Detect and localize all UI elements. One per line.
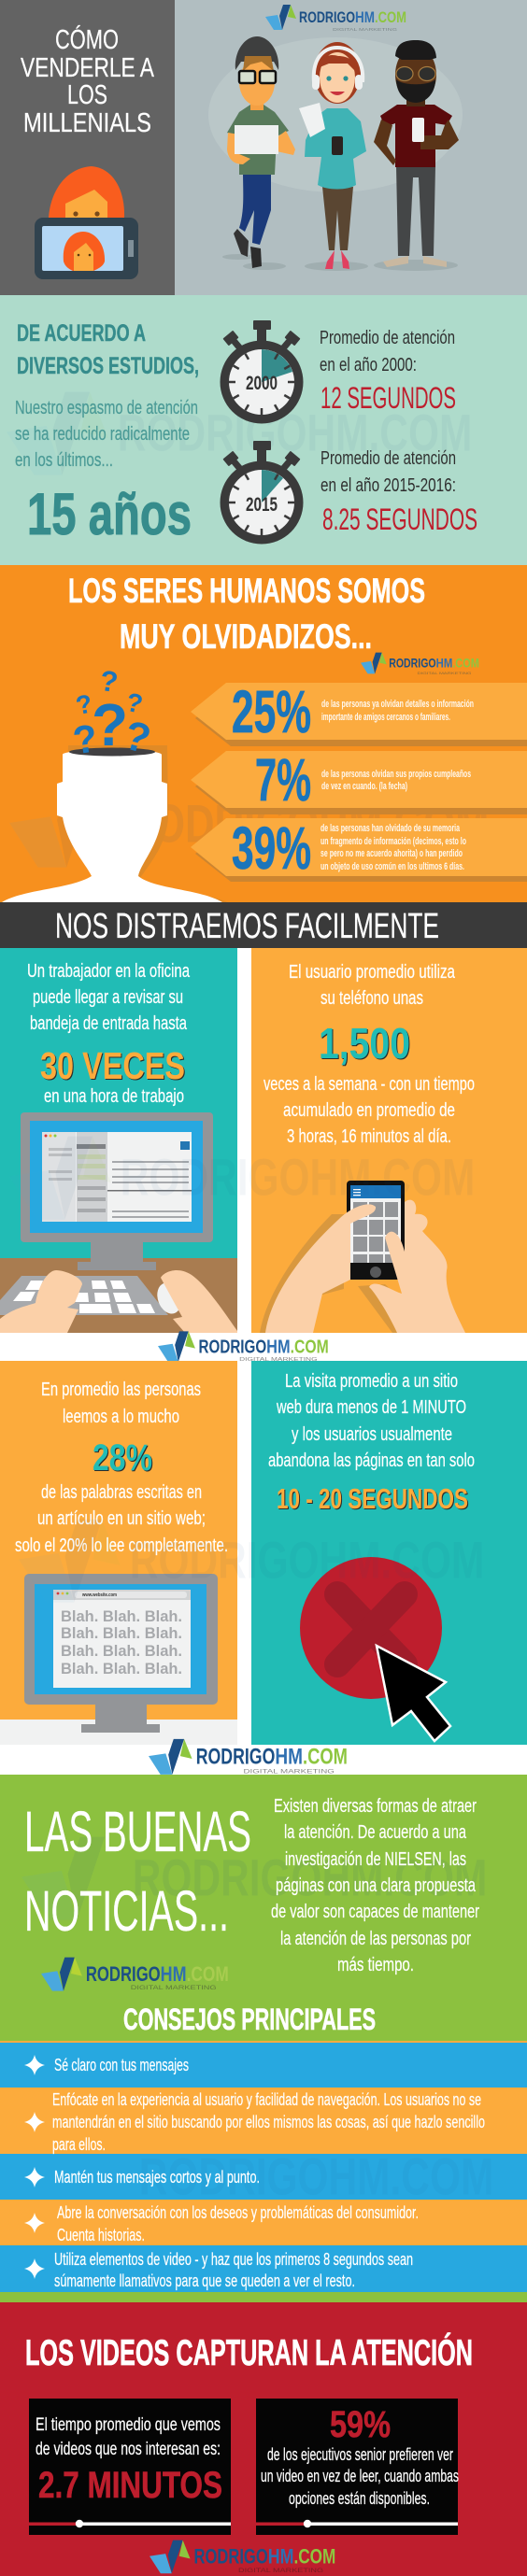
arrow row 39%: [191, 814, 527, 882]
illustration: monitor blah: Blah. Blah. Blah.: [61, 1660, 182, 1677]
title: LOS: [67, 80, 107, 110]
arrow row 39%: 39%: [232, 814, 311, 882]
icon: close button with cursor: [300, 1557, 450, 1741]
text: inbox: Un trabajador en la oficina: [27, 961, 191, 982]
text: attention span: [15, 398, 198, 471]
text: reading: leemos a lo mucho: [63, 1407, 179, 1427]
arrow row 25%: [191, 678, 527, 746]
logo: RODRIGO: [194, 2545, 268, 2569]
icon: stopwatch 2015: [221, 441, 303, 544]
logo: .COM: [375, 8, 406, 26]
text: Nielsen: [271, 1796, 479, 1975]
title: MILLENIALS: [23, 108, 151, 138]
illustration: monitor blah: Blah. Blah. Blah.: [61, 1624, 182, 1642]
illustration: monitor blah: Blah. Blah. Blah.: [61, 1642, 182, 1660]
panel: abandonment: [251, 1361, 527, 1745]
heading: NOTICIAS...: [24, 1879, 229, 1943]
text: year 2015: Promedio de atención: [320, 448, 456, 469]
illustration: monitor blah: [24, 1574, 218, 1733]
panel: inbox: [0, 948, 237, 1333]
text: phone intro: El usuario promedio utiliza: [289, 962, 456, 983]
video card 1: El tiempo promedio que vemos: [36, 2414, 221, 2435]
icon: stopwatch 2015: 2015: [246, 494, 278, 516]
text: visit: y los usuarios usualmente: [292, 1424, 452, 1445]
text: year 2000: Promedio de atención: [320, 328, 455, 348]
logo: section divider: .COM: [291, 1336, 329, 1357]
text: inbox: puede llegar a revisar su: [33, 987, 183, 1008]
logo: DIGITAL MARKETING: [333, 27, 397, 33]
icon: stopwatch 2000: 2000: [246, 373, 278, 394]
title: [21, 24, 155, 138]
person: woman with headphones: [299, 42, 368, 271]
text: attention span: Nuestro espasmo de atención: [15, 398, 198, 418]
watermark: office row: [9, 1137, 475, 1220]
icon: head with question marks: ?: [120, 712, 155, 763]
logo: section divider: RODRIGO: [199, 1336, 266, 1357]
text: reading: un artículo en un sitio web;: [37, 1508, 206, 1529]
text: inbox: [27, 961, 191, 1107]
logo: section divider: DIGITAL MARKETING: [239, 1357, 318, 1363]
video card 1: de videos que nos interesan es:: [36, 2439, 221, 2459]
video card 1: [29, 2399, 231, 2535]
logo: .COM: [293, 2545, 335, 2569]
tip 5: [24, 2250, 413, 2290]
stat: 28%: 28%: [93, 1437, 152, 1479]
text: attention span: en los últimos...: [15, 450, 113, 471]
person: man with sunglasses: [374, 40, 459, 271]
logo: [150, 2541, 335, 2574]
logo: [361, 653, 479, 675]
logo: HM: [161, 1962, 187, 1986]
text: year 2015: [320, 448, 477, 536]
text: Nielsen: más tiempo.: [337, 1955, 414, 1975]
illustration: monitor blah: www.website.com: [81, 1592, 117, 1598]
icon: head with question marks: [2, 664, 228, 902]
panel: reading: [0, 1361, 237, 1745]
logo: RODRIGO: [299, 8, 355, 26]
tip 1: [24, 2055, 189, 2075]
text: inbox: bandeja de entrada hasta: [30, 1013, 188, 1034]
logo: .COM: [187, 1962, 229, 1986]
video card 2: [256, 2399, 459, 2535]
text: year 2015: en el año 2015-2016:: [320, 475, 456, 496]
watermark: reading row: [19, 1520, 484, 1603]
heading: LAS BUENAS: [24, 1800, 251, 1863]
title: VENDERLE A: [21, 53, 155, 83]
stat: 30 veces: 30 VECES: [40, 1044, 185, 1087]
panel: tips: [0, 2041, 527, 2292]
arrow row 7%: 7%: [255, 746, 311, 814]
video card 1: 2.7 MINUTOS: [38, 2465, 222, 2506]
watermark: [7, 392, 472, 475]
heading: [17, 320, 199, 379]
logo: section divider 2: HM: [275, 1745, 303, 1770]
person: man with tablet: [222, 36, 295, 270]
text: attention span: se ha reducido radicalmente: [15, 424, 190, 445]
heading: [68, 572, 425, 656]
logo: RODRIGO: [86, 1962, 161, 1986]
text: year 2000: en el año 2000:: [320, 355, 417, 375]
logo: section divider 2: .COM: [303, 1745, 348, 1770]
text: reading: [15, 1380, 228, 1556]
logo: .COM: [452, 657, 479, 672]
logo: DIGITAL MARKETING: [238, 2568, 323, 2574]
panel: hero left: [0, 0, 175, 295]
logo: HM: [355, 8, 375, 26]
heading: DIVERSOS ESTUDIOS,: [17, 353, 199, 379]
icon: head with question marks: ?: [70, 715, 100, 762]
tip 4: [24, 2203, 419, 2244]
illustration: computer: [0, 1112, 237, 1333]
icon: head with question marks: ?: [73, 688, 95, 720]
heading: DE ACUERDO A: [17, 320, 146, 347]
icon: head with question marks: ?: [123, 687, 146, 719]
tip 1: Sé claro con tus mensajes: [54, 2056, 189, 2074]
tip 3: Mantén tus mensajes cortos y al punto.: [54, 2168, 260, 2187]
logo: [41, 1958, 229, 1991]
logo: HM: [268, 2545, 293, 2569]
text: visit: La visita promedio a un sitio: [285, 1371, 458, 1392]
tip 4: Cuenta historias.: [57, 2226, 145, 2244]
tip 2: [24, 2090, 485, 2154]
text: phone intro: su teléfono unas: [320, 988, 423, 1009]
stat: 1,500: 1,500: [319, 1019, 410, 1068]
stat: 15 años: 15 años: [27, 482, 192, 547]
arrow row 7%: [191, 746, 527, 814]
icon: head with question marks: ?: [98, 664, 120, 699]
text: visit: [268, 1371, 475, 1471]
logo: DIGITAL MARKETING: [417, 671, 471, 675]
panel: phone use: [251, 948, 527, 1333]
logo: section divider 2: [149, 1739, 348, 1775]
watermark: [9, 782, 489, 868]
icon: head with question marks: ?: [92, 691, 128, 758]
logo: [265, 5, 406, 33]
logo: section divider 2: DIGITAL MARKETING: [244, 1768, 335, 1775]
tip 5: súmamente llamativos para que se queden a ver el resto.: [54, 2272, 355, 2290]
title: CÓMO: [55, 24, 119, 55]
icon: stopwatch 2000: [221, 320, 303, 424]
logo: RODRIGO: [389, 657, 436, 672]
text: Nielsen: la atención. De acuerdo a una: [284, 1822, 467, 1843]
arrow row 7%: de vez en cuando. (la fecha): [321, 781, 407, 792]
panel: hero right: [175, 0, 527, 295]
text: reading: solo el 20% lo lee completamente.: [15, 1536, 228, 1556]
text: reading: En promedio las personas: [41, 1380, 201, 1400]
panel: forgetful humans: [0, 565, 527, 902]
text: phone intro: 3 horas, 16 minutos al día.: [287, 1126, 451, 1147]
panel: videos: [0, 2302, 527, 2576]
arrow row 25%: 25%: [232, 678, 311, 745]
heading: [24, 1800, 251, 1943]
video card 2: 59%: [330, 2404, 391, 2445]
watermark: [21, 1837, 487, 1920]
panel: good news: [0, 1775, 527, 2041]
text: phone intro: acumulado en promedio de: [283, 1100, 455, 1121]
logo: section divider: HM: [266, 1336, 291, 1357]
logo: section divider 2: RODRIGO: [196, 1745, 275, 1770]
tip 2: para ellos.: [52, 2135, 106, 2154]
tip 3: [24, 2167, 260, 2187]
text: inbox: en una hora de trabajo: [44, 1086, 184, 1107]
illustration: hands on phone: [260, 1181, 465, 1333]
panel: attention stats: [0, 295, 527, 565]
logo: section divider: [158, 1331, 329, 1363]
text: year 2000: 12 SEGUNDOS: [320, 381, 456, 415]
text: phone intro: [264, 962, 475, 1147]
green strip: [0, 2292, 527, 2302]
logo: DIGITAL MARKETING: [131, 1985, 217, 1991]
text: reading: de las palabras escritas en: [41, 1482, 202, 1503]
video card 2: opciones están disponibles.: [289, 2489, 430, 2508]
heading: consejos: CONSEJOS PRINCIPALES: [123, 2003, 376, 2036]
logo: HM: [436, 657, 452, 672]
icon: girl with phone: [35, 166, 138, 279]
text: year 2000: [320, 328, 456, 415]
illustration: monitor blah: Blah. Blah. Blah.: [61, 1607, 182, 1625]
heading: MUY OLVIDADIZOS...: [120, 617, 372, 656]
